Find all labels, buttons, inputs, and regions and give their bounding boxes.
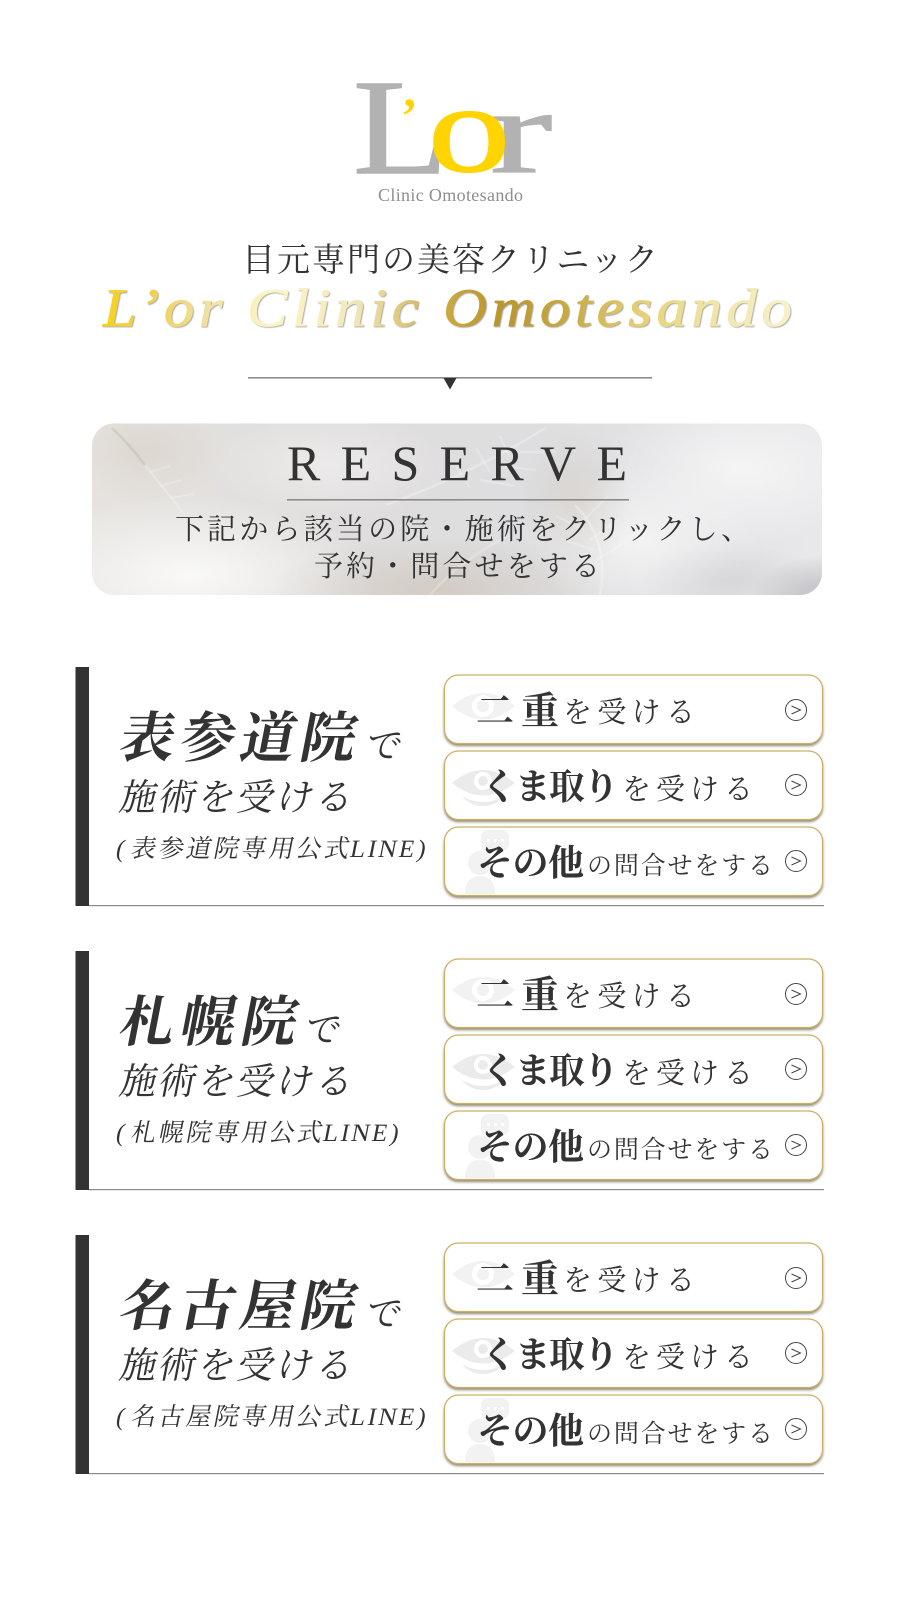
branch heading: LINE (348, 1404, 417, 1431)
branch heading: 札幌院 (114, 993, 303, 1054)
button: double eyelid (444, 675, 822, 744)
button: double eyelid: 二重 (476, 1259, 559, 1301)
button: other enquiries: の問合せをする (587, 1420, 773, 1448)
branch heading: 表参道院 (114, 709, 362, 770)
button: dark circle removal: くま取り (481, 767, 619, 807)
branch heading: 施術を受ける (116, 1062, 357, 1103)
button: double eyelid: 二重 (476, 691, 559, 733)
branch heading: 札幌院専用公式 (129, 1119, 325, 1147)
branch heading: 施術を受ける (116, 1346, 357, 1387)
logo (353, 51, 552, 205)
panel instruction text (175, 513, 750, 583)
panel: reserve (92, 424, 822, 595)
branch heading: 表参道院専用公式 (129, 835, 352, 863)
section: nagoya (76, 1235, 824, 1474)
logo mark: L'or: r (490, 66, 552, 199)
branch heading: で (362, 726, 406, 766)
panel feather background (92, 424, 822, 595)
branch heading: ( (114, 836, 127, 863)
button: other enquiries: その他 (477, 1411, 584, 1451)
branch heading: LINE (348, 836, 417, 863)
button: dark circle removal (444, 1035, 822, 1104)
button: other enquiries: の問合せをする (587, 1136, 773, 1164)
heading: gold clinic name: L’or Clinic Omotesando (102, 279, 792, 338)
branch heading (114, 993, 401, 1147)
accent bar (76, 1235, 89, 1474)
button: dark circle removal: を受ける (622, 1341, 753, 1374)
button: other enquiries: その他 (477, 1127, 584, 1167)
branch heading: 名古屋院専用公式 (129, 1403, 352, 1431)
button: dark circle removal (444, 1319, 822, 1388)
button: dark circle removal: を受ける (622, 773, 753, 806)
button: dark circle removal: を受ける (622, 1057, 753, 1090)
button: dark circle removal: くま取り (481, 1335, 619, 1375)
logo mark: L'or (353, 51, 552, 203)
button: double eyelid: 二重 (476, 975, 559, 1017)
branch heading: で (301, 1010, 345, 1050)
branch heading (114, 1277, 428, 1431)
branch heading: ) (415, 1404, 428, 1431)
branch heading: LINE (321, 1120, 390, 1147)
branch heading: ( (114, 1404, 127, 1431)
button: dark circle removal: くま取り (481, 1051, 619, 1091)
logo caption: Clinic Omotesando (378, 185, 523, 205)
divider arrow (248, 377, 652, 390)
button: other enquiries (444, 827, 822, 896)
logo mark: L'or: ’ (401, 87, 418, 143)
logo mark: L'or: o (428, 59, 510, 198)
button: other enquiries (444, 1395, 822, 1464)
button: dark circle removal (444, 751, 822, 820)
button: double eyelid: を受ける (563, 696, 695, 729)
panel title: RESERVE (287, 435, 627, 491)
panel instruction text: 予約・問合せをする (314, 550, 600, 583)
accent bar (76, 951, 89, 1190)
branch heading: 名古屋院 (114, 1277, 362, 1338)
section: sapporo (76, 951, 824, 1190)
button: double eyelid (444, 1243, 822, 1312)
button: double eyelid (444, 959, 822, 1028)
panel instruction text: 下記から該当の院・施術をクリックし、 (175, 513, 750, 546)
branch heading: ) (415, 836, 428, 863)
button: double eyelid: を受ける (563, 1264, 695, 1297)
accent bar (76, 667, 89, 906)
heading: clinic tagline: 目元専門の美容クリニック (242, 242, 658, 279)
button: other enquiries: その他 (477, 843, 584, 883)
button: other enquiries (444, 1111, 822, 1180)
branch heading: 施術を受ける (116, 778, 357, 819)
button: double eyelid: を受ける (563, 980, 695, 1013)
branch heading (114, 709, 428, 863)
button: other enquiries: の問合せをする (587, 852, 773, 880)
logo mark: L'or: L (353, 51, 449, 203)
branch heading: で (362, 1294, 406, 1334)
branch heading: ( (114, 1120, 127, 1147)
branch heading: ) (388, 1120, 401, 1147)
section: omotesando (76, 667, 824, 906)
